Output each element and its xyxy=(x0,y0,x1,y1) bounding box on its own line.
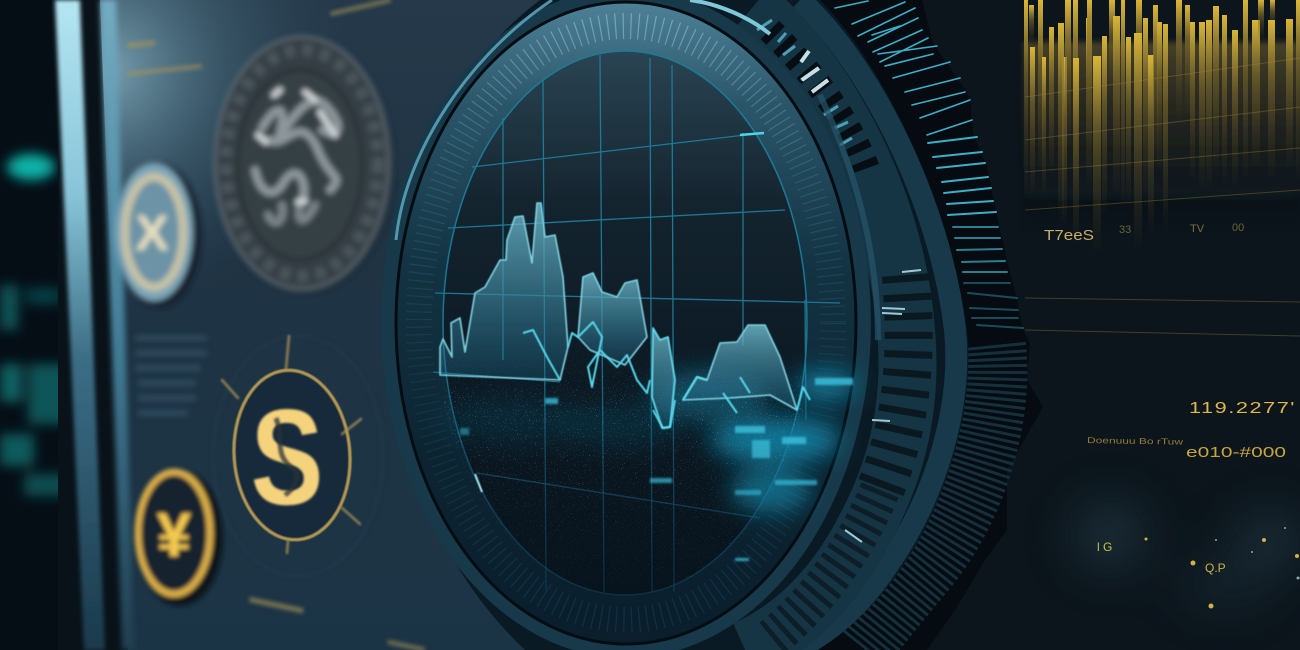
panel: glowing frame edge xyxy=(55,0,128,650)
icon: gold yen coin xyxy=(137,470,223,606)
icon: gold dollar ring: S xyxy=(251,383,323,534)
screen tick band xyxy=(419,26,833,620)
figure: gold value: 119.2277' xyxy=(1189,400,1296,417)
icon: faded cream coin: X xyxy=(135,205,169,261)
caption: gold range text: e010-#000 xyxy=(1186,444,1286,461)
glow under chart xyxy=(440,369,857,512)
panel: left strip with blurred readouts xyxy=(0,0,72,650)
map: dim landmass with gold specks: Q.P xyxy=(1205,561,1226,575)
radar device xyxy=(381,0,1043,650)
icon: gold yen coin: ¥ xyxy=(157,501,192,570)
outer ring xyxy=(795,0,956,650)
fringe upper streaks xyxy=(835,1,1023,328)
axis labels: 00 xyxy=(1232,222,1244,234)
fringe lower bristles xyxy=(860,345,996,650)
axis labels xyxy=(1044,222,1244,244)
panel: coin dashboard xyxy=(100,0,560,650)
comb band xyxy=(745,8,921,650)
map: dim landmass with gold specks: l G xyxy=(1097,540,1112,554)
speckle noise xyxy=(438,346,812,594)
axis labels: 33 xyxy=(1119,224,1131,236)
bar chart: gold bars xyxy=(1024,0,1300,256)
lit rim top xyxy=(396,0,878,340)
icon: faded cream coin xyxy=(115,163,201,307)
caption: gold range text xyxy=(1087,435,1286,461)
fringe backing xyxy=(815,0,1043,650)
screen ring xyxy=(381,0,871,650)
device body xyxy=(385,0,968,650)
divider lines xyxy=(1025,298,1300,336)
screen xyxy=(396,2,856,644)
screen inner xyxy=(443,51,807,595)
area chart xyxy=(430,203,860,610)
icon: gold dollar ring xyxy=(213,336,383,576)
caption: gold range text: Doenuuu Bo rTuw xyxy=(1087,435,1184,447)
axis labels: TV xyxy=(1190,223,1205,235)
map: dim landmass with gold specks xyxy=(1075,503,1300,608)
chart grid xyxy=(433,55,840,592)
axis labels: T7eeS xyxy=(1044,227,1094,244)
icon: grey engraved coin xyxy=(215,37,394,293)
blurred panel text xyxy=(127,0,425,650)
